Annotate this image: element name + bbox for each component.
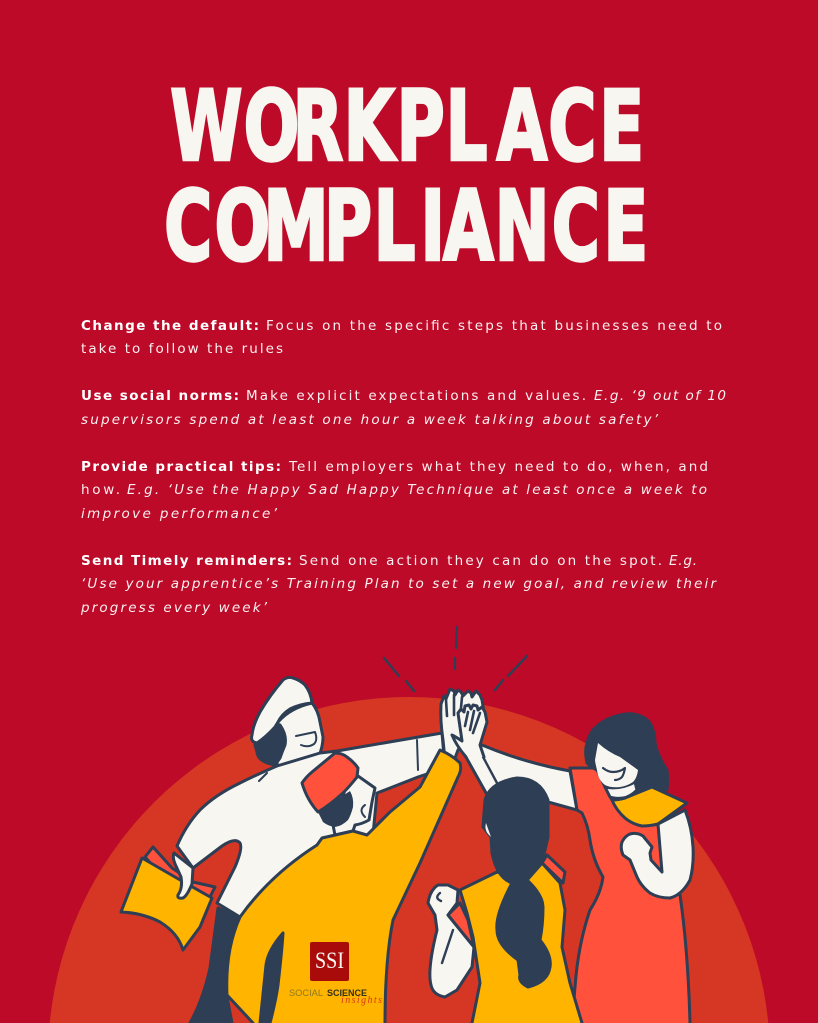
text block: send timely reminders: E.g. [669, 553, 697, 569]
text block: send timely reminders [80, 553, 717, 616]
sleeve detail lines [259, 740, 418, 781]
red hat [302, 753, 358, 812]
coral dress [570, 768, 690, 1023]
text block: provide practical tips: how. [81, 482, 120, 498]
chef leg [190, 908, 242, 1023]
arm crease [437, 893, 453, 963]
text block: use social norms: supervisors spend at least one hour a week talking about safety’ [81, 412, 659, 428]
title: COMPLIANCE [164, 172, 648, 283]
coral woman's face [595, 743, 638, 787]
left raised hand [441, 689, 484, 760]
text block: change the default [81, 318, 722, 357]
ear detail [362, 805, 365, 817]
yellow jacket [227, 750, 461, 1023]
text block: provide practical tips: improve performance’ [81, 506, 278, 522]
logo monogram: SSI [315, 948, 344, 973]
yellow scarf [612, 787, 687, 826]
logo wordmark: SOCIAL [289, 988, 323, 999]
coral woman's raised arm [462, 745, 577, 810]
person: woman in coral [462, 714, 693, 1023]
text block: send timely reminders: progress every week’ [80, 600, 268, 616]
high-five spark lines [384, 627, 527, 691]
illustration: four colleagues high-fiving [121, 677, 693, 1023]
red hat man's hair [318, 791, 353, 827]
text block: provide practical tips: E.g. ‘Use the Happy Sad Happy Technique at least once a week to [127, 482, 707, 498]
chef hat [252, 677, 312, 743]
title [164, 72, 648, 283]
text block: use social norms: Use social norms: [81, 388, 239, 404]
coral woman's smile [603, 768, 625, 780]
text block: use social norms: E.g. ‘9 out of 10 [594, 388, 726, 404]
arm crease [482, 755, 497, 783]
coral woman's hair [586, 714, 668, 795]
person: chef in white [121, 677, 445, 1023]
red hat man's face [333, 776, 375, 835]
chef face [277, 703, 323, 768]
text block: provide practical tips: Provide practical tips: [81, 459, 281, 475]
logo: Social Science Insights: SCIENCE [327, 988, 367, 999]
finger detail lines [446, 695, 480, 733]
logo badge [310, 942, 349, 981]
long hair and ponytail [483, 778, 550, 987]
right raised hand [452, 705, 487, 757]
ear [485, 823, 491, 837]
yellow top [460, 863, 582, 1023]
text block: change the default: take to follow the rules [81, 341, 283, 357]
background semicircle [50, 697, 768, 1023]
text block: change the default: Focus on the specific steps that businesses need to [266, 318, 722, 334]
woman's left arm and fist [428, 885, 474, 997]
chef smile [296, 732, 316, 746]
logo script word: insights [341, 995, 382, 1006]
coral woman's bent arm and fist [621, 810, 693, 898]
text block: provide practical tips: Tell employers what they need to do, when, and [288, 459, 708, 475]
person: man in yellow [227, 750, 461, 1023]
gap between legs [260, 933, 283, 1023]
chef hair [255, 725, 285, 765]
text block: send timely reminders: Send one action they can do on the spot. [299, 553, 662, 569]
coral undergarment [448, 855, 565, 947]
coral woman's neck [605, 782, 637, 798]
logo: Social Science Insights [289, 942, 382, 1006]
text block: send timely reminders: Send Timely reminders: [81, 553, 292, 569]
document held by chef [121, 847, 215, 950]
text block: change the default: Change the default: [81, 318, 259, 334]
text block: send timely reminders: ‘Use your apprentice’s Training Plan to set a new goal, and review their [81, 576, 717, 592]
title: WORKPLACE [170, 72, 644, 183]
text block: use social norms [81, 388, 726, 428]
chef body and arm [177, 733, 445, 917]
text block: use social norms: Make explicit expectations and values. [246, 388, 586, 404]
chef hand [173, 853, 193, 898]
person: woman seen from behind [428, 778, 582, 1023]
text block: provide practical tips [81, 459, 708, 522]
